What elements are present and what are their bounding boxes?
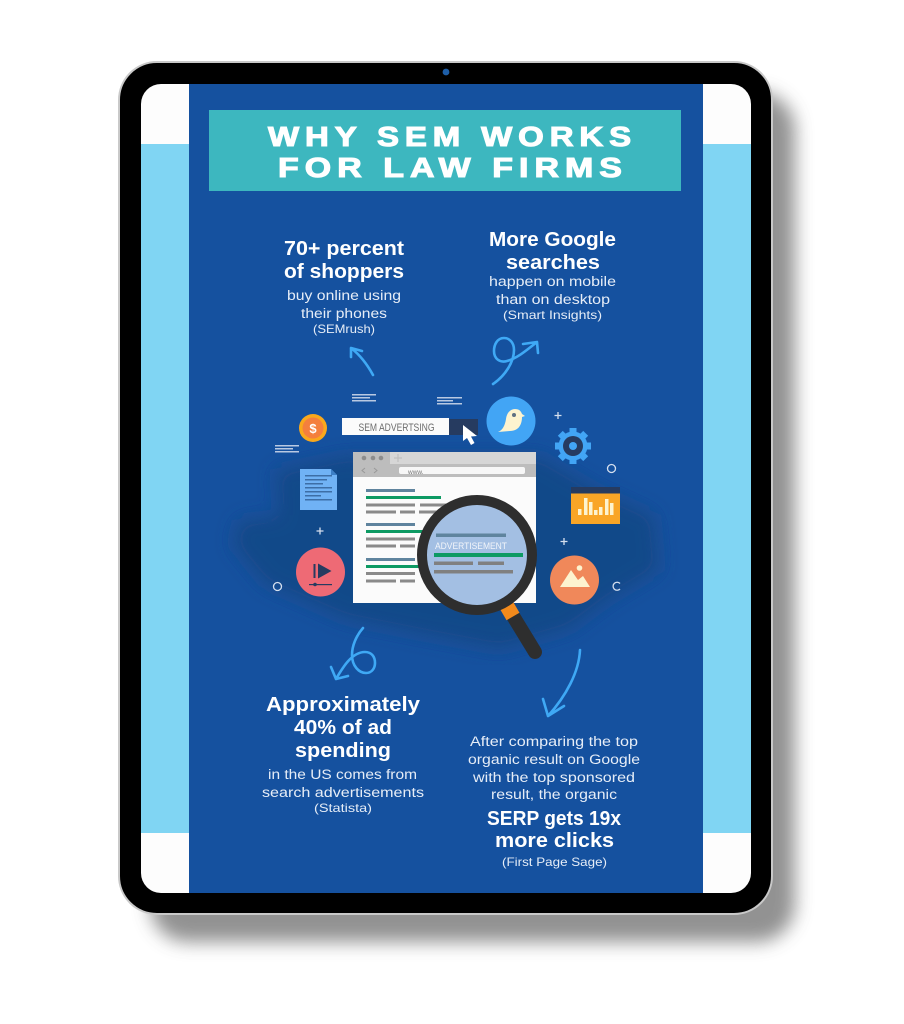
stat: more Google searches on mobile: happen on mobile bbox=[489, 274, 616, 289]
stat: SERP gets 19x more clicks: (First Page Sage) bbox=[502, 855, 607, 869]
decorative plus and ring marks bbox=[274, 412, 620, 590]
stat: SERP gets 19x more clicks: result, the organic bbox=[491, 787, 617, 802]
icon: mountain picture bbox=[550, 556, 599, 604]
stat: 40 percent of ad spending: (Statista) bbox=[314, 801, 372, 815]
magnifying glass: ADVERTISEMENT bbox=[435, 541, 507, 552]
stat: more Google searches on mobile bbox=[489, 229, 616, 322]
search bar: SEM advertising: SEM ADVERTSING bbox=[358, 422, 434, 434]
search bar: SEM advertising bbox=[342, 418, 478, 435]
small text lines bbox=[275, 394, 462, 452]
stat: SERP gets 19x more clicks: more clicks bbox=[495, 830, 614, 852]
stat: SERP gets 19x more clicks: organic result on Google bbox=[468, 752, 640, 767]
stat: SERP gets 19x more clicks: with the top sponsored bbox=[472, 770, 635, 785]
stat: SERP gets 19x more clicks: SERP gets 19x bbox=[487, 808, 621, 830]
arrow: to Google stat bbox=[493, 338, 538, 384]
magnifying glass bbox=[422, 500, 535, 652]
icon: video play bbox=[296, 548, 345, 596]
stat: more Google searches on mobile: (Smart Insights) bbox=[503, 308, 602, 322]
stat: 40 percent of ad spending: in the US comes from bbox=[268, 767, 417, 782]
search results bbox=[366, 489, 450, 582]
icon: cursor bbox=[463, 425, 477, 445]
brush smudge background bbox=[232, 455, 660, 650]
stat: 40 percent of ad spending bbox=[262, 694, 424, 815]
icon: coin: $ bbox=[309, 421, 317, 436]
icon: gear bbox=[555, 428, 591, 464]
stat: SERP gets 19x more clicks: After comparing the top bbox=[470, 734, 638, 749]
stat: 70+ percent of shoppers: (SEMrush) bbox=[313, 322, 375, 336]
stat: 70+ percent of shoppers bbox=[284, 238, 404, 336]
title banner: FOR LAW FIRMS bbox=[278, 152, 628, 183]
arrow: to ad spending stat bbox=[331, 628, 375, 679]
stat: 70+ percent of shoppers: buy online using bbox=[287, 288, 401, 303]
screen background bbox=[141, 84, 751, 893]
stat: more Google searches on mobile: than on desktop bbox=[496, 292, 610, 307]
illustration: SEM advertising bbox=[232, 394, 660, 652]
icon: document bbox=[300, 469, 337, 510]
tablet frame bbox=[119, 62, 772, 914]
stat: 70+ percent of shoppers: 70+ percent bbox=[284, 238, 404, 260]
camera bbox=[443, 69, 449, 75]
stat: 70+ percent of shoppers: their phones bbox=[301, 306, 387, 321]
icon: coin bbox=[299, 414, 327, 442]
stat: SERP gets 19x more clicks bbox=[468, 734, 640, 869]
infographic on tablet mockup bbox=[118, 61, 808, 954]
stat: 40 percent of ad spending: spending bbox=[295, 740, 391, 762]
arrow: to shoppers stat bbox=[351, 348, 373, 375]
icon: bar chart window bbox=[571, 487, 620, 524]
stat: more Google searches on mobile: More Google bbox=[489, 229, 616, 251]
stat: 40 percent of ad spending: 40% of ad bbox=[294, 717, 392, 739]
browser window bbox=[353, 452, 536, 603]
stat: 40 percent of ad spending: search advertisements bbox=[262, 785, 424, 800]
stat: 40 percent of ad spending: Approximately bbox=[266, 694, 421, 716]
arrow: to organic clicks stat bbox=[543, 650, 580, 716]
browser window: www. bbox=[407, 469, 424, 476]
stat: more Google searches on mobile: searches bbox=[506, 252, 600, 274]
stat: 70+ percent of shoppers: of shoppers bbox=[284, 261, 404, 283]
title banner bbox=[209, 110, 681, 191]
icon: bird bbox=[486, 396, 536, 446]
tablet drop shadow bbox=[150, 92, 795, 942]
title banner: WHY SEM WORKS bbox=[268, 121, 637, 152]
